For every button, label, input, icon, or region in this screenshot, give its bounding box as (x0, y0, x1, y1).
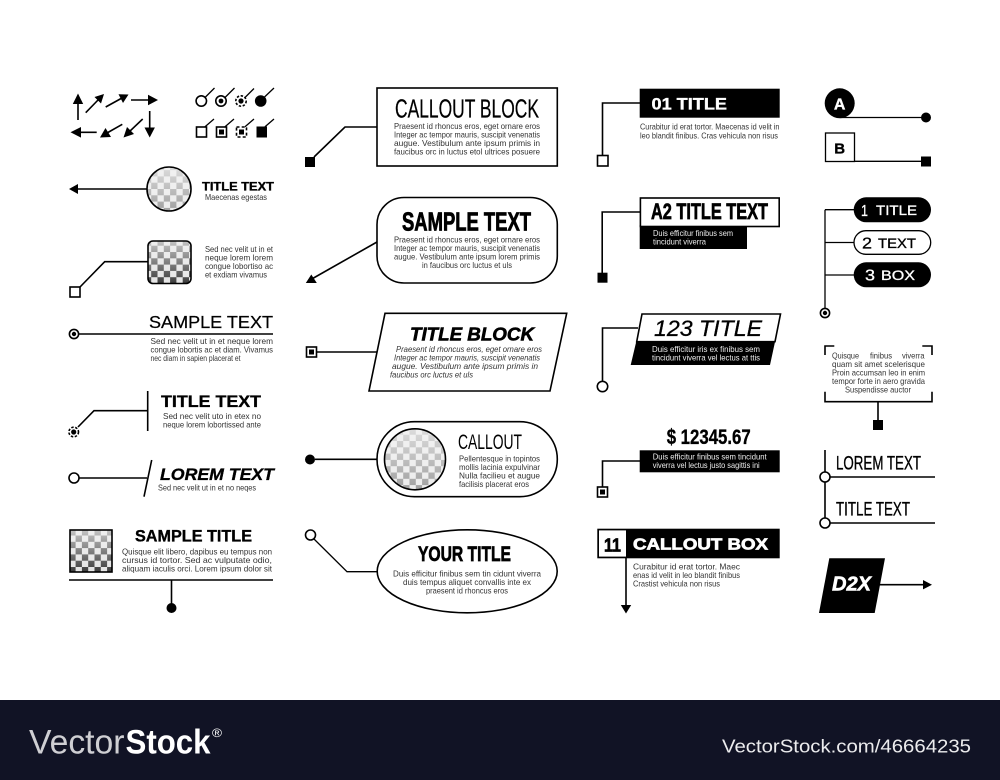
sample text rounded block: Praesent id rhoncus eros, eget ornare eros (394, 235, 540, 244)
callout: title text vertical bar: TITLE TEXT (161, 392, 262, 411)
callout: 01 title: 01 TITLE (652, 95, 727, 113)
title block parallelogram: augue. Vestibulum ante ipsum primis in (392, 362, 538, 371)
callout: sample title with image: aliquam iaculis orci. Lorem ipsum dolor sit (122, 564, 273, 574)
d2x badge with arrow (819, 558, 932, 613)
callout: b badge (826, 133, 931, 166)
title block parallelogram: TITLE BLOCK (410, 324, 536, 345)
callout: a badge (825, 88, 931, 122)
footer url: VectorStock.com/46664235 (722, 736, 971, 757)
sample text rounded block: SAMPLE TEXT (402, 209, 531, 237)
title block parallelogram: Integer ac tempor mauris, suscipit venenatis (394, 354, 540, 362)
callout: 11 callout box: Crastist vehicula non risus (633, 580, 720, 588)
callout: 123 title: 123 TITLE (654, 316, 762, 341)
sample text rounded block: augue. Vestibulum ante ipsum lorem primis (394, 252, 540, 261)
numbered list: TEXT (878, 236, 916, 251)
callout block rectangle: augue. Vestibulum ante ipsum primis in (394, 139, 540, 148)
callout: a badge: A (834, 96, 846, 113)
callout: lorem text slanted bar (69, 460, 276, 497)
callout: sample text underline: SAMPLE TEXT (149, 312, 273, 332)
callout: 11 callout box (597, 529, 780, 614)
callout: sample text underline: Sed nec velit ut in et neque lorem (150, 337, 273, 346)
bracket text callout: tempor forte in aero gravida (832, 377, 925, 386)
sample text rounded block: Integer ac tempor mauris, suscipit venenatis (394, 244, 540, 253)
arrow set (70, 94, 158, 138)
callout: a2 title text: tincidunt viverra (653, 238, 706, 246)
callout pill with circle image: Nulla facilieu et augue (459, 471, 540, 480)
callout: 123 title (597, 314, 780, 392)
sample text rounded block (306, 198, 557, 283)
callout: rounded square image: neque lorem lorem (205, 254, 273, 262)
callout block rectangle: Integer ac tempor mauris, suscipit venenatis (394, 130, 540, 140)
footer logo: Vector (29, 723, 124, 761)
your title ellipse: YOUR TITLE (418, 543, 511, 566)
callout: 01 title: leo blandit finibus. Cras vehicula non risus (640, 131, 778, 140)
your title ellipse (306, 530, 557, 613)
your title ellipse: praesent id rhoncus eros (426, 586, 508, 596)
callout: price: viverra vel lectus justo sagittis ini (653, 461, 760, 470)
numbered list: TITLE (876, 203, 917, 218)
title block parallelogram: Praesent id rhoncus eros, eget ornare eros (396, 345, 542, 354)
callout: b badge: B (834, 141, 845, 158)
callout: a2 title text: A2 TITLE TEXT (651, 199, 768, 224)
callout: price (598, 425, 780, 497)
bracket text callout: finibus (870, 352, 892, 360)
stacked line titles: TITLE TEXT (836, 499, 910, 521)
callout: 11 callout box: Curabitur id erat tortor. Maec (633, 562, 740, 572)
callout: price: Duis efficitur finibus sem tincidunt (653, 452, 767, 461)
callout: 11 callout box: enas id velit in leo blandit finibus (633, 571, 740, 580)
callout: 01 title (598, 89, 780, 166)
callout: 11 callout box: CALLOUT BOX (633, 536, 769, 554)
bracket text callout: quam sit amet scelerisque (832, 360, 925, 369)
callout block rectangle: CALLOUT BLOCK (395, 94, 539, 124)
callout: sample title with image (69, 527, 273, 613)
callout: sample title with image: cursus id tortor. Sed ac vulputate odio, (122, 556, 272, 565)
callout: price: $ 12345.67 (667, 425, 751, 449)
footer logo: ® (212, 726, 222, 740)
callout pill with circle image (305, 422, 557, 497)
callout: title text vertical bar (69, 391, 262, 437)
callout: 123 title: tincidunt viverra vel lectus at ttis (652, 354, 760, 362)
callout: title text vertical bar: Sed nec velit uto in etex no (163, 412, 261, 421)
numbered list: 2 (862, 236, 872, 252)
title block parallelogram: faucibus orc luctus et uls (390, 370, 473, 380)
bracket text callout (825, 346, 932, 430)
callout block rectangle (305, 88, 557, 167)
callout block rectangle: faucibus orc in luctus etol ultrices posuere (394, 148, 540, 156)
bracket text callout: viverra (902, 352, 925, 360)
callout: sample title with image: SAMPLE TITLE (135, 527, 252, 546)
callout: 01 title: Curabitur id erat tortor. Maecenas id velit in (640, 122, 780, 131)
callout: a2 title text (598, 198, 779, 283)
callout: sample title with image: Quisque elit libero, dapibus eu tempus non (122, 548, 272, 556)
callout pill with circle image: Pellentesque in topintos (459, 454, 540, 463)
stacked line titles: LOREM TEXT (836, 452, 921, 474)
footer bar (0, 700, 1000, 780)
bracket text callout: Suspendisse auctor (845, 386, 911, 394)
callout: 123 title: Duis efficitur iris ex finibus sem (652, 345, 760, 354)
bracket text callout: Proin accumsan leo in enim (832, 368, 925, 378)
stacked line titles (820, 450, 935, 528)
callout: sample text underline: congue lobortis ac et diam. Vivamus (150, 346, 273, 354)
sample text rounded block: in faucibus orc luctus et uls (422, 261, 512, 270)
bracket text callout: Quisque (832, 352, 859, 360)
callout: rounded square image: et exdiam vivamus (205, 270, 267, 280)
callout: circle image title text: TITLE TEXT (202, 180, 275, 194)
title block parallelogram (306, 313, 567, 391)
callout pill with circle image: facilisis placerat eros (459, 480, 529, 489)
callout pill with circle image: mollis lacinia expulvinar (459, 463, 540, 472)
callout: circle image title text: Maecenas egestas (205, 193, 267, 202)
callout: sample text underline (69, 312, 273, 363)
callout: rounded square image: congue lobortiso ac (205, 262, 273, 271)
your title ellipse: duis tempus aliquet convallis inte ex (403, 578, 531, 587)
numbered list: BOX (881, 268, 915, 283)
marker set (196, 88, 274, 138)
numbered list (820, 197, 931, 318)
callout: title text vertical bar: neque lorem lobortissed ante (163, 420, 261, 430)
callout: lorem text slanted bar: Sed nec velit ut in et no neqes (158, 484, 256, 493)
callout: rounded square image: Sed nec velit ut in et (205, 245, 274, 254)
callout: a2 title text: Duis efficitur finibus sem (653, 229, 733, 238)
your title ellipse: Duis efficitur finibus sem tin cidunt viverra (393, 570, 541, 578)
callout: sample text underline: nec diam in sapien placerat et (150, 354, 241, 363)
footer logo: Stock (126, 723, 211, 761)
callout: lorem text slanted bar: LOREM TEXT (160, 465, 276, 484)
numbered list: 3 (865, 268, 875, 284)
callout: 11 callout box: 11 (604, 536, 621, 556)
callout: rounded square image (70, 241, 274, 297)
numbered list: 1 (861, 203, 868, 220)
callout: circle image title text (69, 167, 275, 211)
callout block rectangle: Praesent id rhoncus eros, eget ornare eros (394, 122, 540, 131)
d2x badge with arrow: D2X (832, 573, 873, 595)
callout pill with circle image: CALLOUT (458, 430, 522, 454)
